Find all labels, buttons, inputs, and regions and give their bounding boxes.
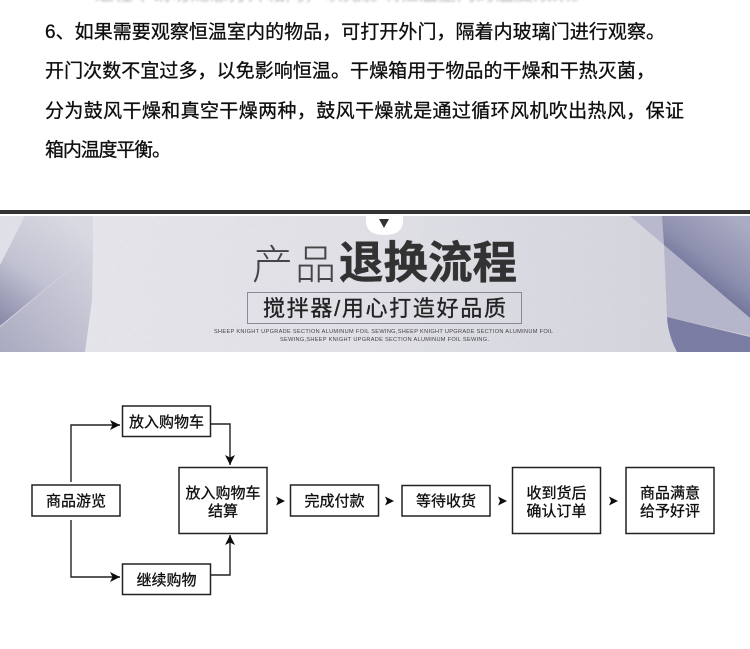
banner small English text: SEWING,SHEEP KNIGHT UPGRADE SECTION ALUMINUM FOIL SEWING. (280, 337, 489, 343)
banner heading: 产品 (252, 231, 336, 291)
box: continue shopping (122, 564, 210, 594)
box: wait for delivery (402, 486, 490, 516)
box: checkout: 结算 (208, 502, 238, 520)
box: browse products (32, 485, 120, 516)
arrow: checkout to payment (276, 496, 285, 506)
box: confirm receipt: 确认订单 (526, 503, 587, 520)
box: add to cart: 放入购物车 (129, 414, 204, 431)
box: confirm receipt (512, 468, 600, 534)
banner heading (252, 231, 517, 291)
arrow: receipt to review (609, 496, 618, 506)
box: browse products: 商品游览 (46, 493, 106, 510)
banner: product return process (0, 216, 750, 352)
box: confirm receipt: 收到货后 (526, 485, 587, 502)
box: satisfied, leave review (626, 468, 714, 534)
arrow: add to cart to checkout (211, 424, 230, 465)
banner heading: 退换流程 (339, 239, 517, 288)
box: complete payment (290, 485, 378, 516)
box: continue shopping: 继续购物 (136, 572, 197, 589)
box: checkout: 放入购物车 (185, 485, 261, 502)
box: complete payment: 完成付款 (304, 493, 365, 510)
box: wait for delivery: 等待收货 (416, 492, 476, 510)
body text paragraph (45, 21, 684, 161)
arrow: browse to add to cart (71, 425, 120, 482)
arrow: continue shopping to checkout (211, 535, 230, 575)
top divider bar (0, 210, 750, 214)
box: checkout (179, 468, 267, 534)
flow chart (32, 406, 714, 594)
banner small English text: SHEEP KNIGHT UPGRADE SECTION ALUMINUM FOIL SEWING,SHEEP KNIGHT UPGRADE SECTION ALUMINUM FOIL (214, 329, 553, 335)
notch with down arrow (366, 216, 403, 235)
box: satisfied, leave review: 给予好评 (640, 503, 700, 520)
banner small English text (214, 329, 553, 343)
box: add to cart (122, 406, 210, 436)
arrow: payment to wait (385, 496, 394, 506)
banner subtitle box: 搅拌器/用心打造好品质 (263, 296, 506, 321)
arrow: wait to receipt (498, 496, 507, 506)
box: satisfied, leave review: 商品满意 (640, 484, 700, 502)
banner background (0, 216, 750, 352)
body text paragraph: 6、如果需要观察恒温室内的物品，可打开外门，隔着内玻璃门进行观察。 (45, 21, 665, 43)
body text paragraph: 箱内温度平衡。 (45, 139, 171, 161)
body text paragraph: 开门次数不宜过多，以免影响恒温。干燥箱用于物品的干燥和干热灭菌， (45, 60, 655, 82)
arrow: browse to continue shopping (71, 520, 120, 577)
body text paragraph: 分为鼓风干燥和真空干燥两种，鼓风干燥就是通过循环风机吹出热风，保证 (45, 100, 684, 122)
